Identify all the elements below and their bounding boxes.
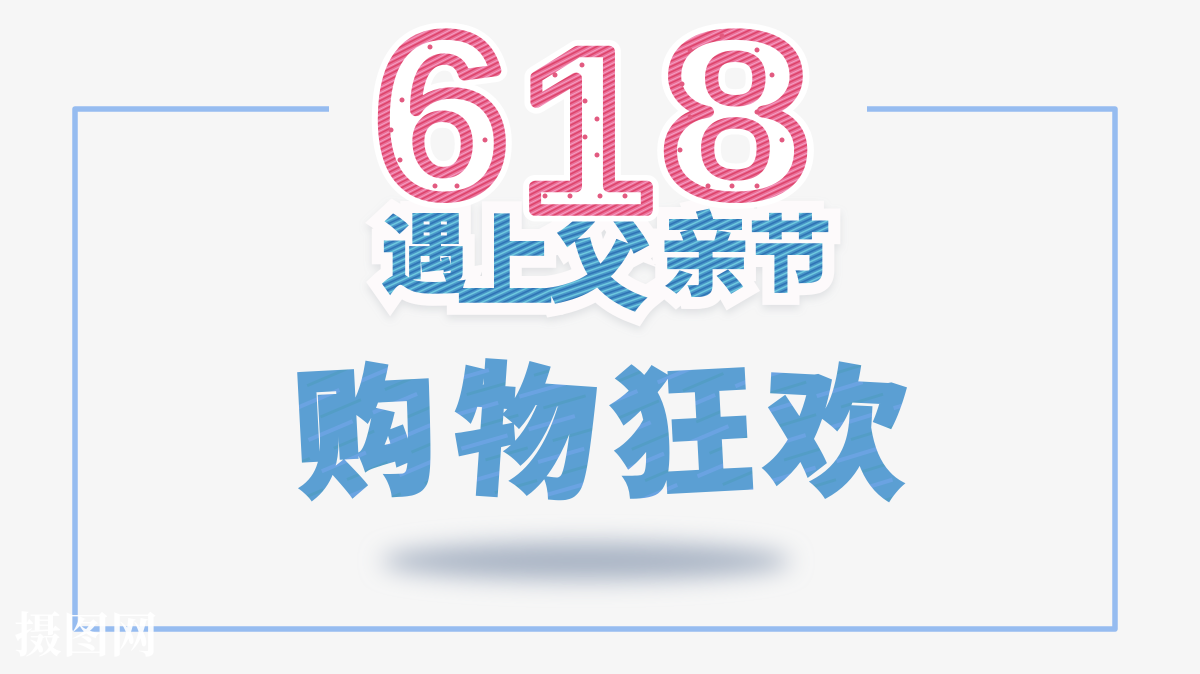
subtitle halo: 上 [455, 208, 555, 320]
watermark: 摄图网 [14, 610, 158, 663]
subtitle halo: 亲 [659, 206, 751, 308]
subtitle halo: 父 [542, 200, 658, 326]
subtitle halo [380, 200, 832, 326]
digit 1: 1 [520, 1, 653, 259]
subtitle halo: 遇 [380, 206, 468, 305]
subtitle letters: 上 [455, 208, 555, 320]
shadow under the heading [381, 542, 791, 580]
heading: 购物狂欢: 物 [448, 351, 601, 520]
number 618 [375, 0, 809, 259]
subtitle halo: 节 [748, 209, 832, 303]
heading: 购物狂欢: 狂 [607, 352, 757, 519]
subtitle letters: 遇 [380, 206, 468, 305]
blue frame [75, 109, 1115, 629]
heading: 购物狂欢: 购 [290, 352, 440, 519]
subtitle: 遇上父亲节 [380, 200, 832, 326]
digit halo [375, 0, 809, 259]
subtitle letters: 父 [542, 200, 658, 326]
polka dots [388, 34, 784, 198]
subtitle letters: 节 [748, 209, 832, 303]
subtitle letters: 亲 [659, 206, 751, 308]
subtitle letters [380, 200, 832, 326]
digit halo: 1 [520, 1, 653, 259]
heading: 购物狂欢: 欢 [761, 352, 911, 519]
heading: 购物狂欢 [290, 351, 911, 520]
